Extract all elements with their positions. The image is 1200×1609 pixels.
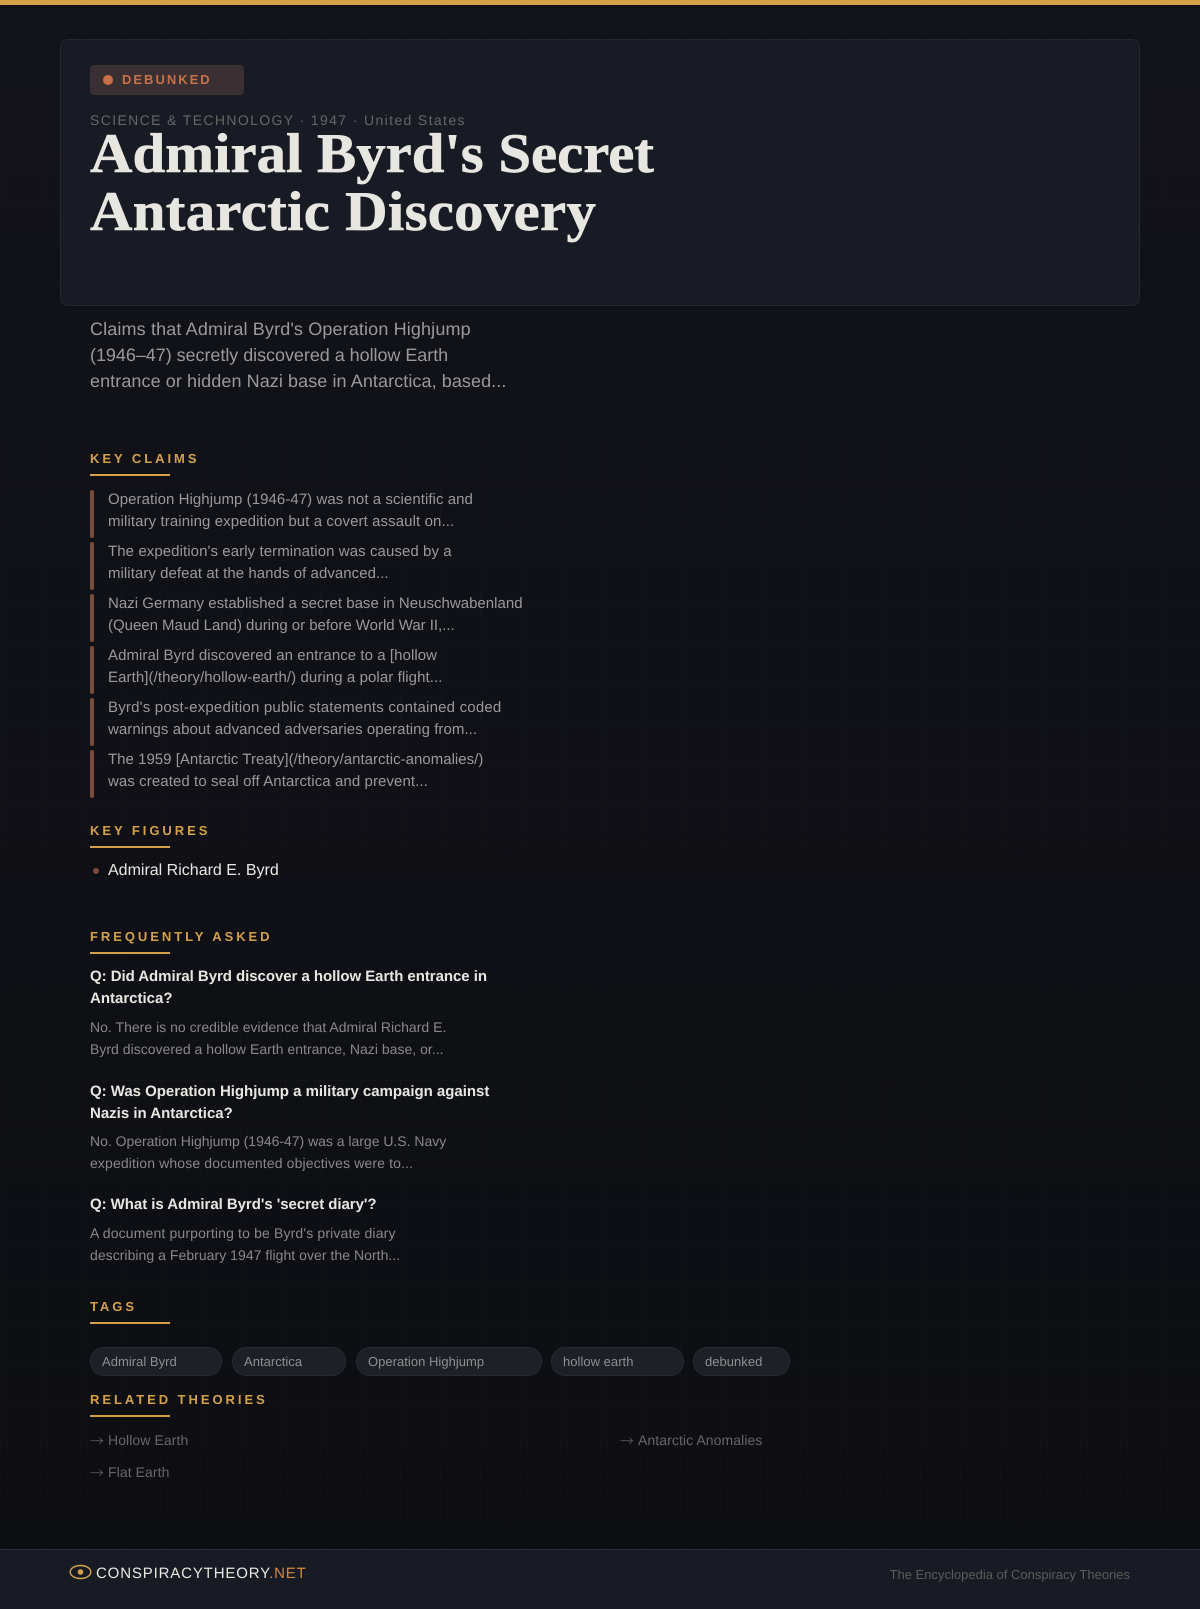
tag: Operation Highjump <box>368 1354 484 1369</box>
claim 2: military defeat at the hands of advanced... <box>108 565 389 582</box>
claim 5: Byrd's post-expedition public statements contained coded <box>108 699 501 716</box>
summary text: Claims that Admiral Byrd's Operation Highjump <box>90 319 471 339</box>
panel: key claims list <box>90 490 523 798</box>
tag <box>90 1347 222 1376</box>
faq 3 answer <box>90 1225 400 1263</box>
claim 4: Admiral Byrd discovered an entrance to a [hollow <box>108 647 437 664</box>
faq 1 question <box>90 968 487 1007</box>
badge: debunked <box>90 65 244 95</box>
title <box>90 123 654 243</box>
tag <box>693 1347 790 1376</box>
summary text: (1946–47) secretly discovered a hollow Earth <box>90 345 448 365</box>
faq 3 answer: A document purporting to be Byrd's private diary <box>90 1225 396 1241</box>
tag pills <box>90 1347 790 1376</box>
heading: frequently asked: FREQUENTLY ASKED <box>90 929 273 944</box>
heading: related theories: RELATED THEORIES <box>90 1392 268 1407</box>
logo wordmark: CONSPIRACYTHEORY.NET <box>96 1565 307 1582</box>
tag: Antarctica <box>244 1354 302 1369</box>
badge label: DEBUNKED <box>122 72 212 87</box>
tag: hollow earth <box>563 1354 633 1369</box>
panel: hero header <box>60 39 1140 306</box>
tag <box>356 1347 542 1376</box>
title: Admiral Byrd's Secret <box>90 123 654 185</box>
heading: key claims: KEY CLAIMS <box>90 451 199 466</box>
claim 2: The expedition's early termination was caused by a <box>108 543 452 560</box>
summary text <box>90 319 506 391</box>
tag <box>551 1347 684 1376</box>
faq 1 question: Q: Did Admiral Byrd discover a hollow Earth entrance in <box>90 968 487 985</box>
faq 2 question: Nazis in Antarctica? <box>90 1105 233 1122</box>
claim 4: Earth](/theory/hollow-earth/) during a polar flight... <box>108 669 442 686</box>
faq 1 answer: Byrd discovered a hollow Earth entrance, Nazi base, or... <box>90 1041 444 1057</box>
faq 2 question: Q: Was Operation Highjump a military campaign against <box>90 1083 489 1100</box>
claim 5: warnings about advanced adversaries operating from... <box>108 721 477 738</box>
title: Antarctic Discovery <box>90 181 596 243</box>
figure entry <box>93 862 279 879</box>
claim 1 <box>90 490 473 538</box>
claim 3 <box>90 594 523 642</box>
related link: → Hollow Earth <box>90 1431 188 1451</box>
summary text: entrance or hidden Nazi base in Antarctica, based... <box>90 371 506 391</box>
claim 1: military training expedition but a covert assault on... <box>108 513 454 530</box>
claim 3: Nazi Germany established a secret base in Neuschwabenland <box>108 595 523 612</box>
faq 3 question: Q: What is Admiral Byrd's 'secret diary'? <box>90 1196 377 1213</box>
figure name: Admiral Richard E. Byrd <box>108 862 279 879</box>
related link: → Flat Earth <box>90 1463 170 1483</box>
tag: debunked <box>705 1354 762 1369</box>
faq 1 answer <box>90 1019 446 1057</box>
tag <box>232 1347 346 1376</box>
claim 6 <box>90 750 483 798</box>
footer <box>0 1549 1200 1609</box>
faq 1 question: Antarctica? <box>90 990 173 1007</box>
claim 2 <box>90 542 452 590</box>
claim 3: (Queen Maud Land) during or before World War II,... <box>108 617 455 634</box>
faq 2 answer: No. Operation Highjump (1946-47) was a large U.S. Navy <box>90 1133 446 1149</box>
tag: Admiral Byrd <box>102 1354 177 1369</box>
heading: tags: TAGS <box>90 1299 137 1314</box>
faq 2 answer <box>90 1133 446 1171</box>
top accent bar <box>0 0 1200 5</box>
claim 5 <box>90 698 501 746</box>
icon: status dot <box>103 75 113 85</box>
faq 2 question <box>90 1083 490 1122</box>
faq 1 answer: No. There is no credible evidence that Admiral Richard E. <box>90 1019 446 1035</box>
icon: bullet <box>93 868 99 874</box>
footer tagline: The Encyclopedia of Conspiracy Theories <box>890 1567 1130 1582</box>
faq 2 answer: expedition whose documented objectives were to... <box>90 1155 413 1171</box>
claim 6: was created to seal off Antarctica and prevent... <box>108 773 428 790</box>
claim 4 <box>90 646 442 694</box>
faq 3 answer: describing a February 1947 flight over the North... <box>90 1247 400 1263</box>
category and date line: SCIENCE & TECHNOLOGY · 1947 · United States <box>90 112 466 128</box>
claim 6: The 1959 [Antarctic Treaty](/theory/antarctic-anomalies/) <box>108 751 483 768</box>
claim 1: Operation Highjump (1946-47) was not a scientific and <box>108 491 473 508</box>
heading: key figures: KEY FIGURES <box>90 823 210 838</box>
icon: eye logo <box>70 1564 92 1580</box>
related link: → Antarctic Anomalies <box>620 1431 762 1451</box>
